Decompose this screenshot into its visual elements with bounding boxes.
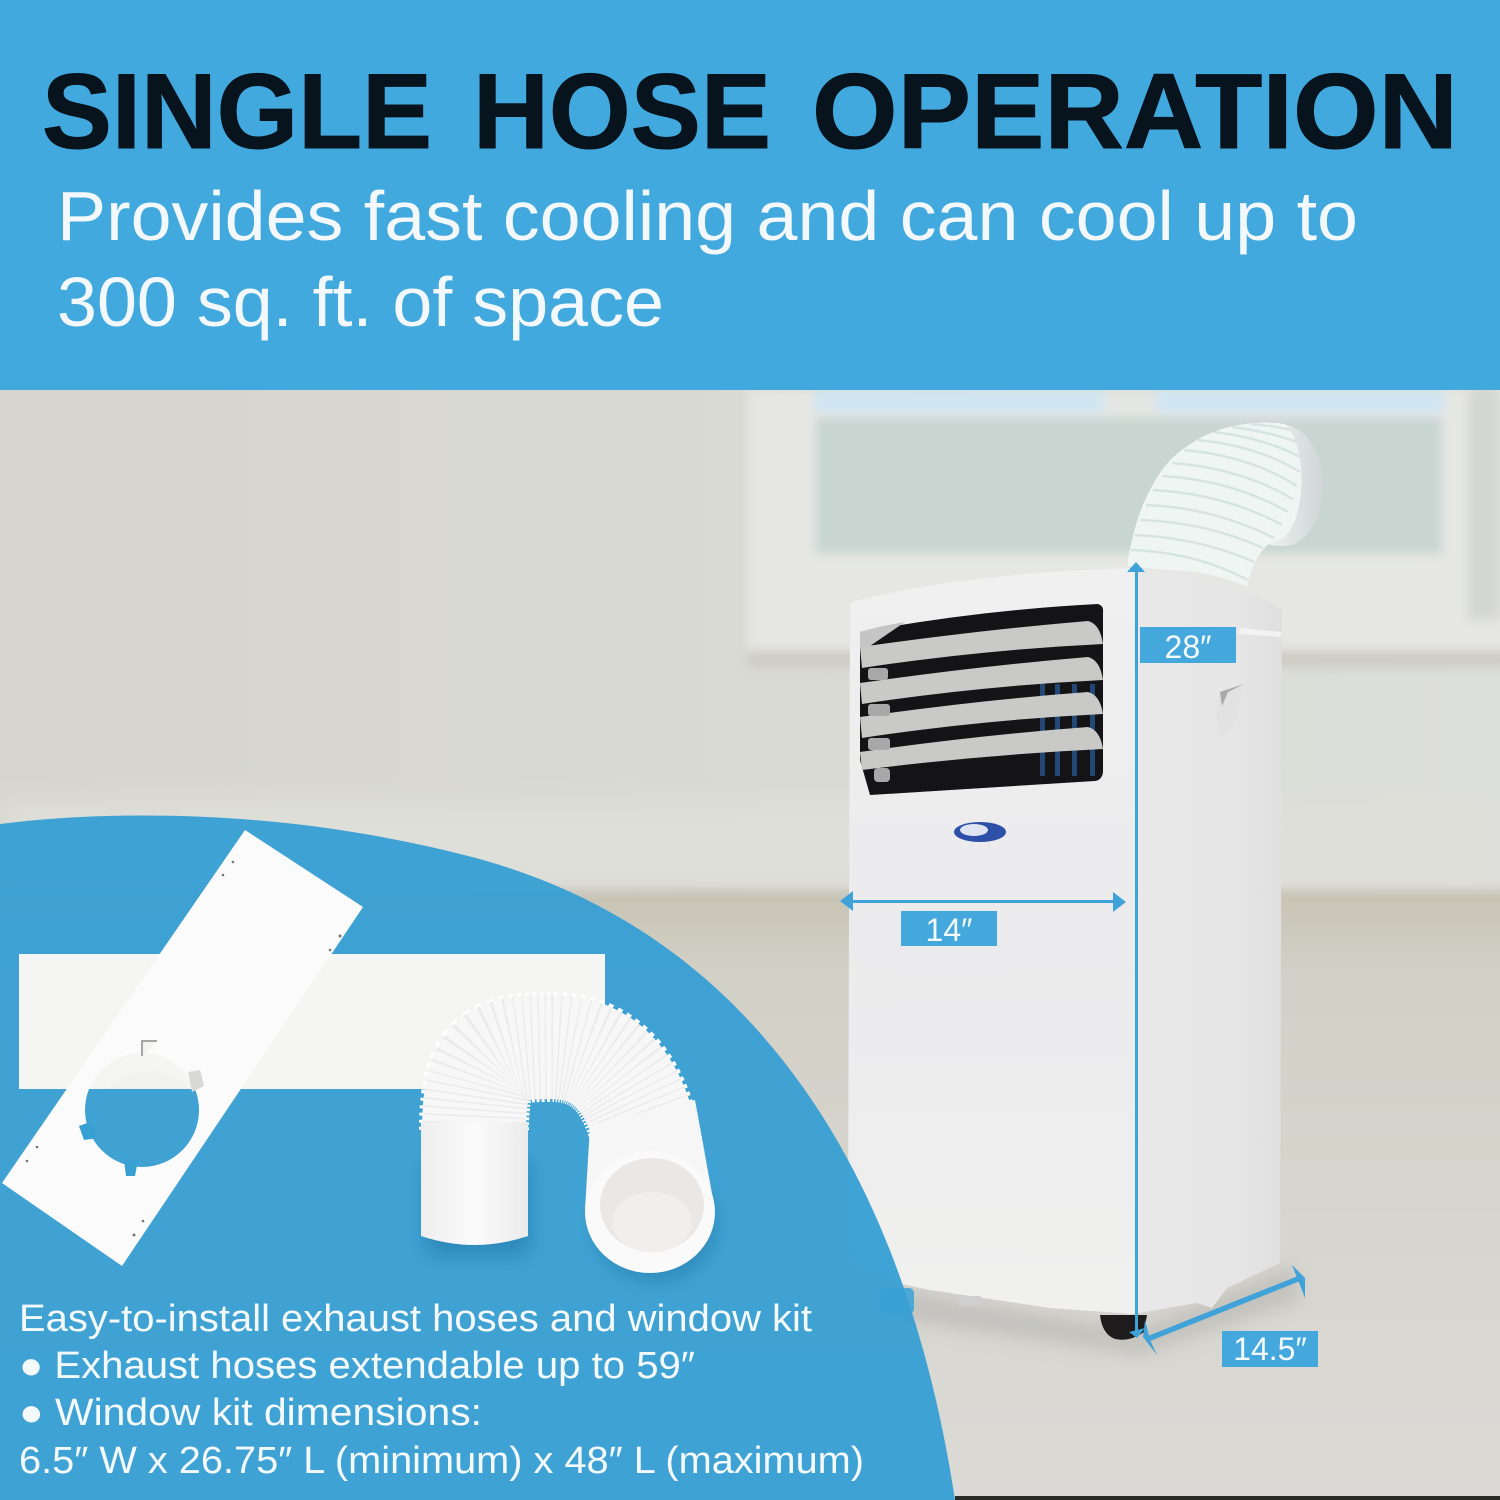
open end bbox=[585, 1100, 715, 1210]
kit description text bbox=[19, 1298, 864, 1482]
dimension arrow: width 14 inches bbox=[840, 891, 1126, 912]
kit description text: ● Exhaust hoses extendable up to 59″ bbox=[19, 1345, 695, 1387]
dimension arrow: depth 14.5 inches bbox=[1143, 1265, 1305, 1355]
bottom edge strip bbox=[955, 1496, 1500, 1500]
header band bbox=[0, 0, 1500, 390]
title: SINGLE bbox=[42, 51, 432, 171]
title: HOSE bbox=[473, 51, 771, 171]
portable air conditioner bbox=[848, 423, 1323, 1355]
straight cuff bbox=[421, 1122, 528, 1245]
subtitle: Provides fast cooling and can cool up to bbox=[57, 177, 1358, 255]
floor shadow under unit bbox=[900, 1265, 1300, 1355]
louvers bbox=[860, 621, 1103, 770]
air vent bbox=[860, 604, 1103, 795]
label: 14.5 inches: 14.5″ bbox=[1233, 1331, 1307, 1367]
room background photo bbox=[0, 390, 1500, 1500]
side handle bbox=[1216, 683, 1244, 738]
brand badge bbox=[954, 822, 1006, 842]
title bbox=[42, 51, 1458, 171]
window kit panel with round opening bbox=[2, 830, 363, 1266]
kit description text: 6.5″ W x 26.75″ L (minimum) x 48″ L (maximum) bbox=[19, 1440, 864, 1482]
label: 28 inches bbox=[1140, 627, 1236, 665]
label: 14 inches: 14″ bbox=[926, 912, 972, 948]
kit description text: Easy-to-install exhaust hoses and window kit bbox=[19, 1298, 812, 1340]
exhaust hose on unit bbox=[1128, 423, 1323, 587]
title: OPERATION bbox=[812, 51, 1458, 171]
subtitle bbox=[57, 177, 1358, 341]
window frame bbox=[748, 390, 1500, 668]
subtitle: 300 sq. ft. of space bbox=[57, 263, 664, 341]
kit panel background bbox=[0, 815, 955, 1500]
corrugated hose body bbox=[1128, 423, 1301, 587]
opening tabs bbox=[79, 1041, 204, 1176]
kit description text: ● Window kit dimensions: bbox=[19, 1392, 482, 1434]
hose end cap bbox=[1265, 423, 1323, 546]
dimension arrow: height 28 inches bbox=[1127, 562, 1145, 1338]
flexible exhaust hose bbox=[421, 1047, 715, 1280]
pleated arch bbox=[474, 1047, 650, 1160]
window kit strip bbox=[19, 954, 605, 1089]
unit front bbox=[848, 568, 1135, 1314]
wheels and feet bbox=[880, 1288, 1147, 1340]
label: 14 inches bbox=[901, 911, 997, 948]
unit side bbox=[1125, 568, 1282, 1314]
upper part of opening shows strip bbox=[107, 1071, 190, 1089]
label: 28 inches: 28″ bbox=[1165, 629, 1211, 665]
